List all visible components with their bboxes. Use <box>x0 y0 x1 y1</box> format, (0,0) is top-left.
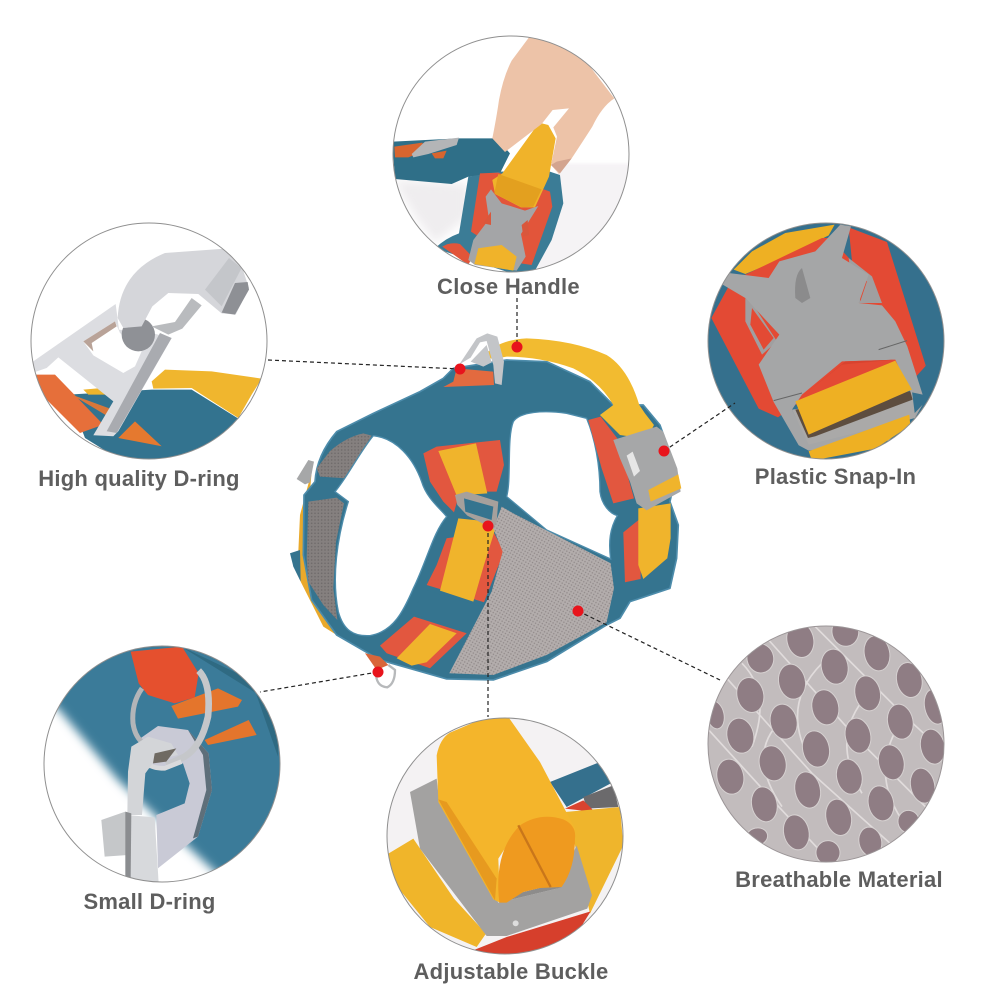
side buckle <box>297 460 314 484</box>
mesh chest panel <box>449 507 614 675</box>
left opening <box>335 436 447 636</box>
upper left lining <box>317 433 372 478</box>
orange webbing tab <box>443 368 494 387</box>
heading: breathable material: Breathable Material <box>735 867 943 892</box>
heading: close handle: Close Handle <box>437 274 580 299</box>
heading: plastic snap-in: Plastic Snap-In <box>755 464 916 489</box>
bottom red panel <box>380 617 467 668</box>
panel: plastic snap-in detail <box>702 218 944 461</box>
callout line: small D-ring <box>260 672 378 692</box>
top D-ring <box>459 333 504 385</box>
right red panels <box>588 417 634 503</box>
panel: adjustable buckle detail <box>387 717 623 955</box>
heading: adjustable buckle: Adjustable Buckle <box>414 959 608 984</box>
buckle strap <box>648 474 681 502</box>
right opening <box>507 412 617 559</box>
heading: small D-ring: Small D-ring <box>84 889 215 914</box>
callout line: close handle <box>516 298 518 347</box>
lower yellow strap <box>440 518 497 602</box>
lower left lining <box>307 498 344 620</box>
lower red panel <box>427 532 504 602</box>
panel: high quality D-ring detail <box>31 223 267 465</box>
panel: close handle detail <box>392 36 632 273</box>
right lower red <box>623 518 641 582</box>
plastic buckle <box>613 427 681 510</box>
bottom yellow strap <box>397 624 457 666</box>
callout line: high quality D-ring <box>268 360 460 369</box>
callout line: plastic snap-in <box>664 403 735 451</box>
callout line: adjustable buckle <box>487 526 489 717</box>
centre yellow strap <box>438 443 487 496</box>
center harness <box>290 333 681 687</box>
callout line: breathable material <box>578 611 720 680</box>
harness body <box>303 360 678 680</box>
panel: small D-ring detail <box>44 646 280 882</box>
side tab <box>290 550 301 582</box>
left yellow strap <box>298 472 337 635</box>
right lower yellow strap <box>638 503 671 579</box>
centre red panel <box>423 440 504 512</box>
buckle window <box>627 452 640 477</box>
marker dots <box>372 342 670 678</box>
teal cross strap <box>413 590 484 634</box>
small orange tab <box>365 653 388 670</box>
middle buckle <box>455 492 498 529</box>
yellow handle <box>483 338 654 439</box>
heading: high quality D-ring: High quality D-ring <box>38 466 240 491</box>
panel: breathable material detail <box>704 615 949 867</box>
small D-ring <box>376 665 395 687</box>
